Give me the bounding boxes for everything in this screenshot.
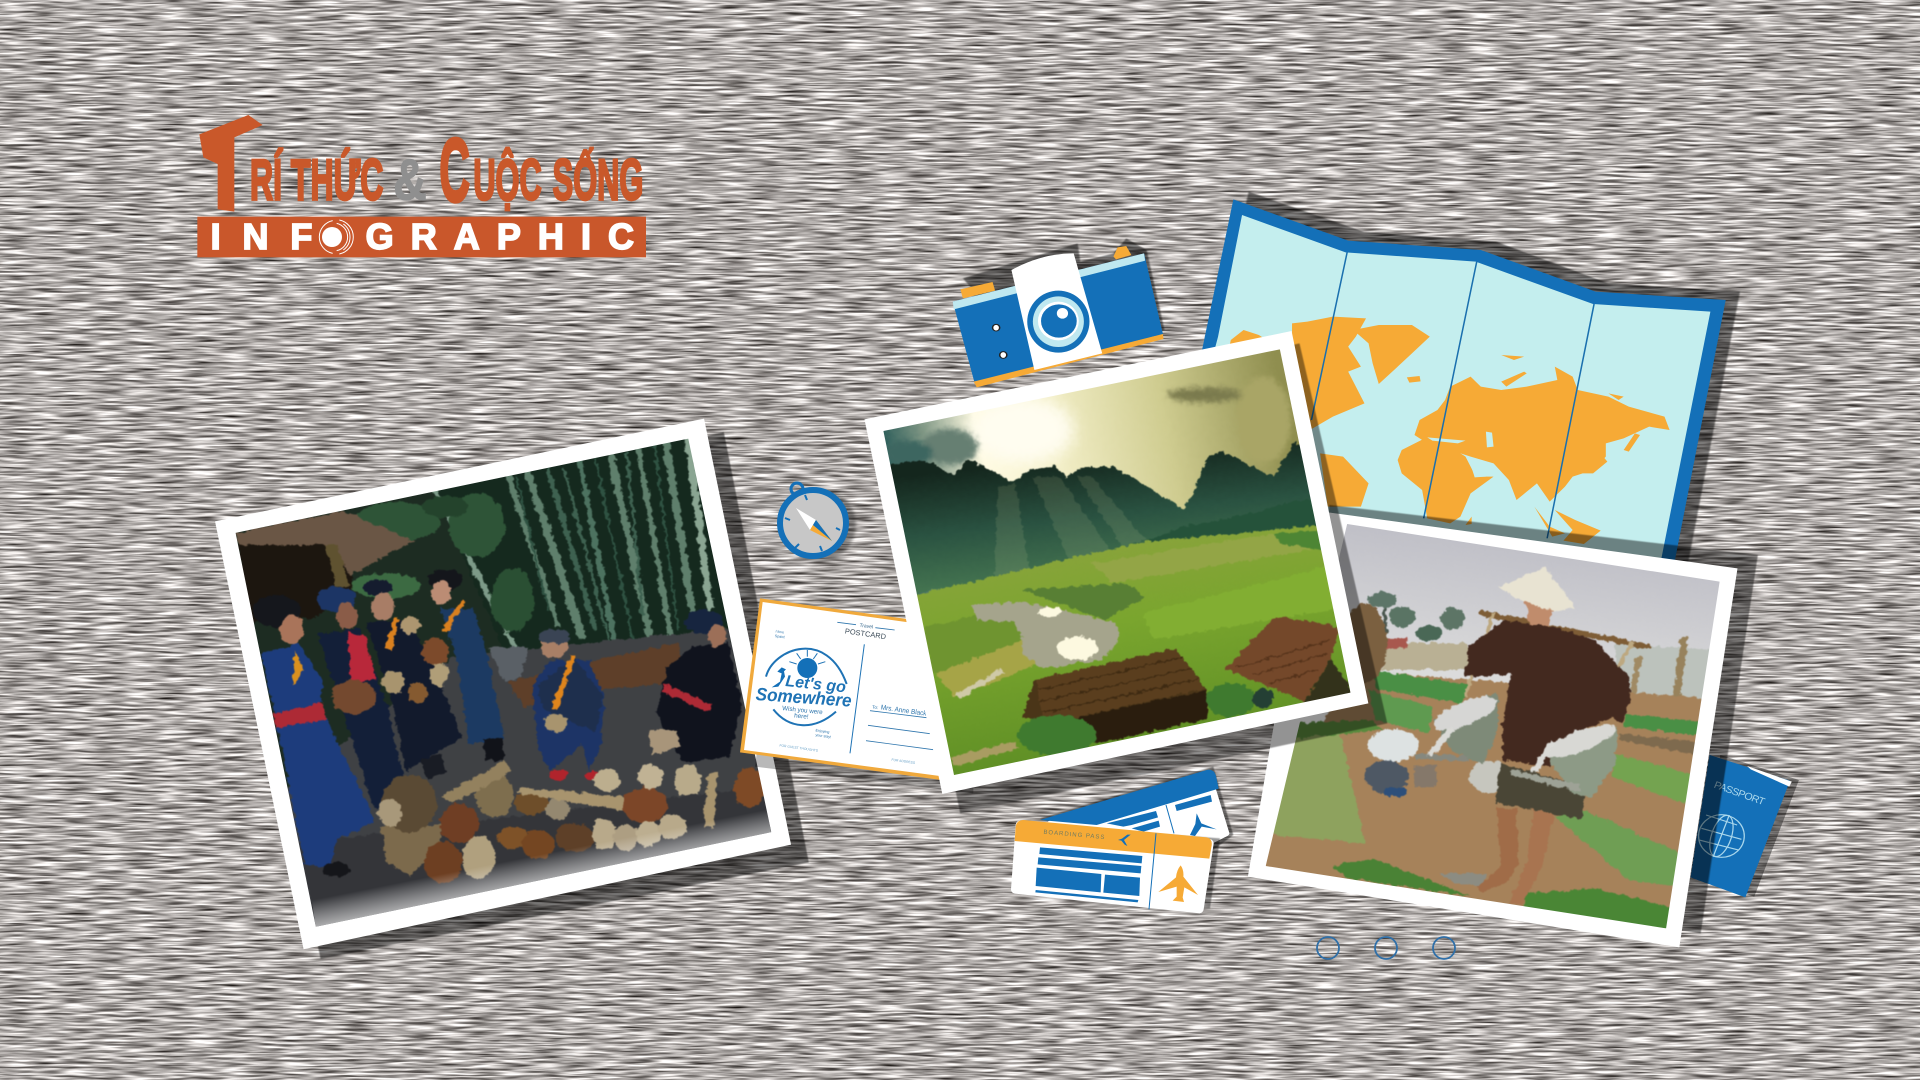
postcard logo: Let's go Somewhere: Somewhere <box>755 684 852 711</box>
conical hat <box>1499 567 1575 612</box>
compass ticks <box>785 495 840 551</box>
pass orange plane <box>1158 865 1198 902</box>
photo 3: farmer with watering cans <box>1248 504 1758 948</box>
postcard divider <box>850 644 864 753</box>
postcard address: To: <box>872 704 879 710</box>
camera shadow <box>963 238 1164 370</box>
seated man weaving <box>532 629 604 780</box>
watering can left <box>1415 689 1501 765</box>
wetland vegetation <box>924 607 1022 673</box>
clouds <box>884 377 1291 467</box>
photo 2 picture <box>833 303 1407 793</box>
camera white centre <box>1011 253 1102 370</box>
back pass <box>1040 770 1227 843</box>
sky <box>833 303 1407 620</box>
map frame <box>1185 199 1726 567</box>
passport spine <box>1691 755 1726 883</box>
thatched hut <box>238 543 352 621</box>
map sheet <box>1195 215 1710 563</box>
compass loop <box>791 483 803 495</box>
pass header plane <box>1118 835 1131 846</box>
tree line <box>1146 500 1336 542</box>
front pass shadow <box>1020 823 1220 908</box>
farmer legs <box>1477 807 1519 893</box>
postcard small notes: your stay! <box>815 733 831 739</box>
logo: Tri thức & Cuộc sống Infographic <box>197 115 646 257</box>
foliage <box>350 493 534 632</box>
shrubs <box>1017 683 1274 755</box>
postcard logo: Let's go Somewhere: Let's go <box>785 673 847 696</box>
villager 1 <box>261 643 376 868</box>
carrying pole <box>1483 613 1647 647</box>
photo 1: ethnic minority villagers weaving baskets <box>215 418 810 960</box>
postcard logo: Let's go Somewhere <box>755 649 852 725</box>
postcard stamp text: I love <box>775 629 784 635</box>
boarding passes <box>1015 767 1233 909</box>
pass label: BOARDING PASS <box>1043 830 1106 841</box>
garden beds <box>1266 672 1702 908</box>
passport shadow <box>1697 755 1799 897</box>
postcard small notes: FOR ADDRESS <box>891 758 916 765</box>
map shadow <box>1195 192 1740 567</box>
passport globe <box>1699 813 1744 859</box>
postcard logo: Let's go Somewhere: here! <box>794 712 809 721</box>
postcard small notes <box>779 728 916 765</box>
passport label: PASSPORT <box>1712 780 1767 808</box>
postcard <box>740 598 973 793</box>
farmer shorts <box>1495 763 1586 818</box>
path <box>952 742 1019 767</box>
camera icon <box>953 238 1164 387</box>
villager 4 <box>441 609 504 744</box>
map seas <box>1427 432 1494 477</box>
villager 3 <box>366 620 462 771</box>
front pass <box>1015 820 1212 909</box>
photo 1 shadow <box>233 432 809 959</box>
ground <box>279 629 777 936</box>
watering can right <box>1511 719 1620 797</box>
postcard small notes: Enjoying <box>815 728 830 734</box>
passport <box>1691 755 1799 897</box>
postcard small notes: FOR GUEST THOUGHTS <box>779 743 819 753</box>
logo: Tri thức & Cuộc sống Infographic: C <box>439 121 470 221</box>
postcard shadow <box>755 753 973 793</box>
camera stripe <box>953 253 1145 309</box>
karst mountains <box>871 442 1339 597</box>
held baskets <box>332 679 375 714</box>
pass barcode blocks <box>1035 847 1142 902</box>
continents <box>1226 317 1670 544</box>
banner word INF: INF <box>211 216 312 257</box>
back pass shadow <box>1040 767 1233 850</box>
map fold lines <box>1311 252 1594 538</box>
river <box>971 602 1120 668</box>
folded world map <box>1185 192 1740 567</box>
distant palms and buildings <box>1369 592 1469 670</box>
logo words Rí thức: RÍ THỨC <box>250 148 383 212</box>
postcard orange edge <box>740 598 973 784</box>
sun rays <box>995 477 1146 577</box>
camera base band <box>974 334 1163 387</box>
photo 2 white frame <box>864 331 1368 794</box>
baskets on the ground <box>378 761 765 883</box>
farmer head <box>1524 593 1556 625</box>
banner O icon <box>319 220 353 254</box>
logo word sống: SỐNG <box>553 147 643 212</box>
photo 1 white frame <box>215 419 791 949</box>
photo 1 bottom fade <box>312 812 771 926</box>
structures at the right <box>1615 637 1711 727</box>
photo 2: karst valley and rice fields <box>833 303 1407 813</box>
photo 3 shadow <box>1269 505 1758 933</box>
logo word uộc: UỘC <box>473 147 542 212</box>
thatch hat prop <box>1350 602 1388 684</box>
water splash <box>1364 728 1511 797</box>
logo ampersand: & <box>393 148 427 212</box>
photo 3 white frame <box>1248 510 1737 947</box>
postcard white card <box>744 602 973 780</box>
postcard heading: Travel <box>859 623 873 631</box>
pass orange header <box>1015 820 1212 859</box>
camera dots <box>993 324 1007 358</box>
postcard address <box>866 704 933 750</box>
green fields <box>902 523 1367 793</box>
postcard logo: Let's go Somewhere: Wish you were <box>782 705 823 716</box>
compass shadow <box>784 489 856 561</box>
bamboo grove <box>433 429 738 679</box>
camera body <box>953 253 1163 383</box>
banner word GRAPHIC: GRAPHIC <box>366 216 634 257</box>
photo 3 picture <box>1266 524 1720 928</box>
camera buttons <box>960 282 995 298</box>
small hut roof <box>1225 616 1339 702</box>
lower paved ground <box>299 786 771 927</box>
pagination dots <box>1317 937 1455 959</box>
farmer shirt <box>1464 620 1630 767</box>
logo banner <box>197 217 646 257</box>
postcard: Spain! <box>775 634 785 639</box>
passport pages <box>1747 766 1792 787</box>
pass divider <box>1149 833 1156 909</box>
photo 1 picture <box>236 438 772 927</box>
sky <box>1338 524 1720 684</box>
logo letter T <box>199 115 263 212</box>
camera lens <box>1027 291 1089 353</box>
compass needle <box>796 508 832 541</box>
postcard heading <box>837 622 895 641</box>
villager 2 <box>318 629 410 809</box>
photo 2 shadow <box>883 343 1387 813</box>
big hut roof <box>1022 648 1208 740</box>
seated woman right <box>649 610 742 762</box>
postcard heading: POSTCARD <box>844 626 887 641</box>
postcard address: Mrs. Anne Black <box>880 704 927 718</box>
compass icon <box>780 483 856 561</box>
passport cover <box>1691 755 1790 897</box>
compass body <box>780 490 846 556</box>
